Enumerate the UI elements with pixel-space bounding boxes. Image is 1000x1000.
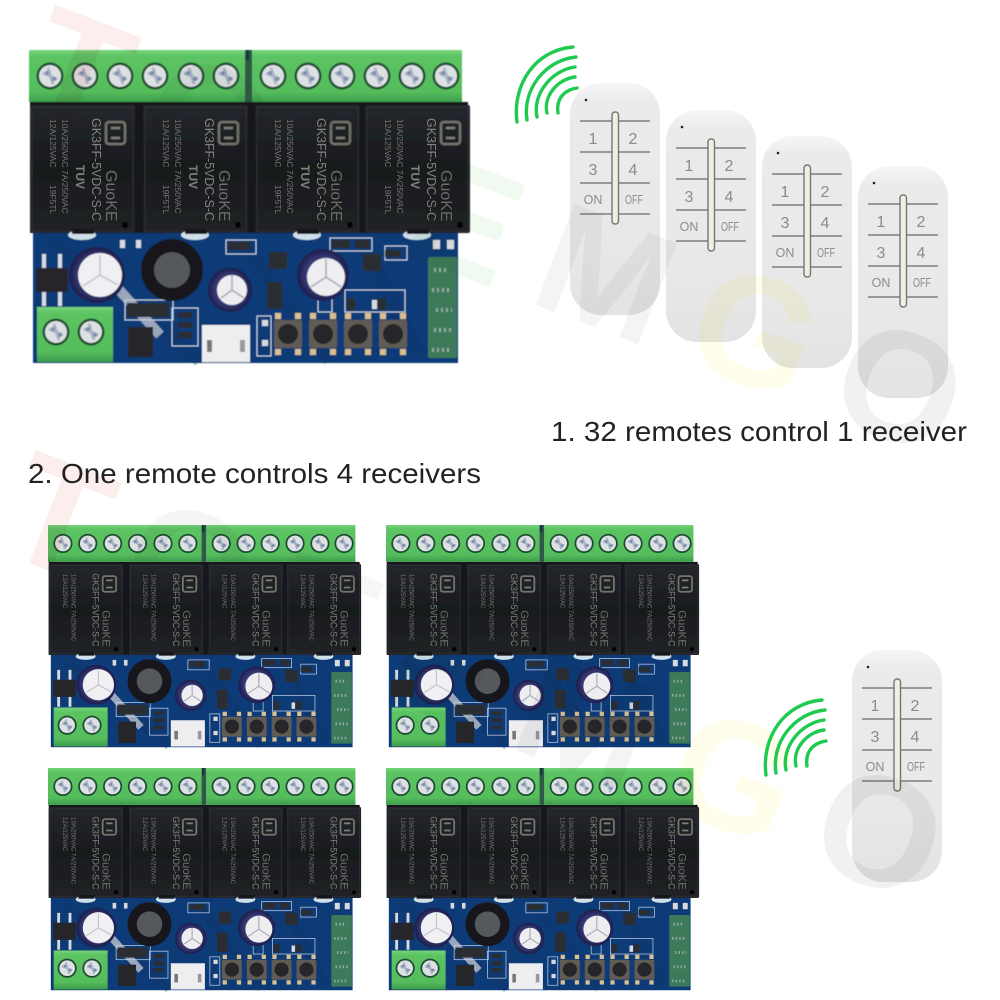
relay board: receiver 1 — [48, 525, 361, 747]
remote bottom: 2 — [911, 698, 920, 715]
relay board: main receiver — [29, 50, 470, 363]
relay board: receiver 2: 12A/125VAC — [479, 574, 485, 609]
relay markings: GuoKE — [102, 170, 119, 222]
remote 3 — [762, 136, 852, 368]
remote 4: OFF — [913, 276, 931, 290]
relay board: receiver 1: GuoKE — [338, 610, 350, 647]
relay markings: 12A/125VAC — [383, 119, 393, 168]
remote 2: ON — [680, 220, 698, 234]
relay board: receiver 1: 12A/125VAC — [141, 574, 147, 609]
relay markings: 12A/125VAC — [48, 119, 58, 168]
remote 3: ON — [776, 246, 794, 260]
relay board: receiver 4: 10A/250VAC 7A/250VAC — [488, 817, 494, 885]
remote 4 — [858, 166, 948, 398]
remote 2: 4 — [725, 189, 734, 206]
relay board: receiver 1: 10A/250VAC 7A/250VAC — [69, 574, 75, 642]
remote 2 — [666, 110, 756, 342]
relay board: receiver 2: 12A/125VAC — [399, 574, 405, 609]
relay board: receiver 4: 12A/125VAC — [559, 817, 565, 852]
caption 1: 1. 32 remotes control 1 receiver — [551, 416, 967, 447]
relay markings: 10A/250VAC 7A/250VAC — [285, 119, 295, 214]
remote 3: 2 — [821, 184, 830, 201]
relay board: receiver 1: 12A/125VAC — [61, 574, 67, 609]
relay board: receiver 3: 10A/250VAC 7A/250VAC — [307, 817, 313, 885]
remote 4: 1 — [877, 214, 886, 231]
relay board: receiver 4: GK3FF-5VDC-S-C — [667, 816, 677, 890]
relay board: receiver 3: GK3FF-5VDC-S-C — [171, 816, 181, 890]
relay board: receiver 3: GuoKE — [100, 853, 112, 890]
remote 2: 2 — [725, 158, 734, 175]
relay board: receiver 3: 12A/125VAC — [141, 817, 147, 852]
relay board: receiver 1: 10A/250VAC 7A/250VAC — [150, 574, 156, 642]
relay board: receiver 3: 12A/125VAC — [61, 817, 67, 852]
remote 1: OFF — [625, 193, 643, 207]
relay board: receiver 3: GuoKE — [180, 853, 192, 890]
remote 4: 3 — [877, 245, 886, 262]
relay board: receiver 4: 12A/125VAC — [399, 817, 405, 852]
relay markings: GuoKE — [437, 170, 454, 222]
relay board: receiver 3: GuoKE — [259, 853, 271, 890]
relay markings: TUV — [186, 165, 200, 189]
relay board: receiver 3: GuoKE — [338, 853, 350, 890]
relay board: receiver 3: GK3FF-5VDC-S-C — [91, 816, 101, 890]
relay board: receiver 2: 12A/125VAC — [637, 574, 643, 609]
relay markings: 10A/250VAC 7A/250VAC — [395, 119, 405, 214]
relay board: receiver 4: GuoKE — [518, 853, 530, 890]
relay board: receiver 2: 10A/250VAC 7A/250VAC — [407, 574, 413, 642]
remote 1: 2 — [629, 131, 638, 148]
relay markings — [48, 118, 454, 222]
relay board: receiver 2: GK3FF-5VDC-S-C — [588, 573, 598, 647]
relay board: receiver 4: GuoKE — [597, 853, 609, 890]
relay board: receiver 2: GuoKE — [438, 610, 450, 647]
remote 3: OFF — [817, 246, 835, 260]
relay board: receiver 2: GuoKE — [597, 610, 609, 647]
remote bottom: OFF — [907, 760, 925, 774]
remote 2: 1 — [685, 158, 694, 175]
relay board: receiver 1: GuoKE — [259, 610, 271, 647]
relay board: receiver 4: 10A/250VAC 7A/250VAC — [567, 817, 573, 885]
relay board: receiver 1: 12A/125VAC — [299, 574, 305, 609]
relay board: receiver 3: 12A/125VAC — [221, 817, 227, 852]
remote 3: 1 — [781, 184, 790, 201]
relay board: receiver 4: GK3FF-5VDC-S-C — [509, 816, 519, 890]
remote 1: 3 — [589, 162, 598, 179]
relay board: receiver 1: GK3FF-5VDC-S-C — [171, 573, 181, 647]
remote 1 — [570, 83, 660, 315]
relay board: receiver 1: 10A/250VAC 7A/250VAC — [307, 574, 313, 642]
remote 1: 1 — [589, 131, 598, 148]
relay markings: GK3FF-5VDC-S-C — [314, 118, 328, 221]
relay markings: GK3FF-5VDC-S-C — [202, 118, 216, 221]
remote bottom: ON — [866, 760, 884, 774]
relay markings: 10A/250VAC 7A/250VAC — [173, 119, 183, 214]
relay board: receiver 2: GuoKE — [676, 610, 688, 647]
remote 1: 4 — [629, 162, 638, 179]
relay board: receiver 4: 12A/125VAC — [479, 817, 485, 852]
relay board: receiver 4: 12A/125VAC — [637, 817, 643, 852]
relay board: receiver 1: GuoKE — [180, 610, 192, 647]
relay board: receiver 3: 12A/125VAC — [299, 817, 305, 852]
remote 2: OFF — [721, 220, 739, 234]
remote bottom: 4 — [911, 729, 920, 746]
remote 4: 4 — [917, 245, 926, 262]
relay board: receiver 2: GK3FF-5VDC-S-C — [509, 573, 519, 647]
relay board: receiver 2: GK3FF-5VDC-S-C — [667, 573, 677, 647]
caption 2: 2. One remote controls 4 receivers — [28, 458, 481, 489]
remote 4: ON — [872, 276, 890, 290]
relay board: receiver 3: 10A/250VAC 7A/250VAC — [229, 817, 235, 885]
relay board: receiver 2: 10A/250VAC 7A/250VAC — [645, 574, 651, 642]
relay markings: 19F5TL — [48, 185, 58, 215]
relay board: receiver 4: GuoKE — [676, 853, 688, 890]
relay board: receiver 4: GK3FF-5VDC-S-C — [429, 816, 439, 890]
relay board: receiver 3: 10A/250VAC 7A/250VAC — [69, 817, 75, 885]
relay board: receiver 4 — [386, 768, 699, 990]
relay markings: TUV — [298, 165, 312, 189]
relay markings: GK3FF-5VDC-S-C — [424, 118, 438, 221]
relay board: receiver 2: 10A/250VAC 7A/250VAC — [567, 574, 573, 642]
relay board: receiver 3: 10A/250VAC 7A/250VAC — [150, 817, 156, 885]
relay board: receiver 1: GuoKE — [100, 610, 112, 647]
relay markings: TUV — [73, 165, 87, 189]
relay board: receiver 2: 12A/125VAC — [559, 574, 565, 609]
relay markings: GuoKE — [215, 170, 232, 222]
relay board: receiver 1: GK3FF-5VDC-S-C — [91, 573, 101, 647]
relay board: receiver 4: GuoKE — [438, 853, 450, 890]
relay markings: TUV — [408, 165, 422, 189]
relay board: receiver 2 — [386, 525, 699, 747]
relay board: receiver 2: GK3FF-5VDC-S-C — [429, 573, 439, 647]
relay markings: 12A/125VAC — [161, 119, 171, 168]
remote 1: ON — [584, 193, 602, 207]
relay board: receiver 3 — [48, 768, 361, 990]
relay board: receiver 1: 12A/125VAC — [221, 574, 227, 609]
relay board: receiver 1: 10A/250VAC 7A/250VAC — [229, 574, 235, 642]
relay board: receiver 3: GK3FF-5VDC-S-C — [250, 816, 260, 890]
remote 4: 2 — [917, 214, 926, 231]
remote 2: 3 — [685, 189, 694, 206]
relay markings: GuoKE — [327, 170, 344, 222]
remote bottom: 1 — [871, 698, 880, 715]
watermark: TOTEMGO — [0, 418, 968, 936]
relay board: receiver 2: 10A/250VAC 7A/250VAC — [488, 574, 494, 642]
relay markings: GK3FF-5VDC-S-C — [89, 118, 103, 221]
relay markings: 19F5TL — [383, 185, 393, 215]
relay markings: 10A/250VAC 7A/250VAC — [60, 119, 70, 214]
relay board: receiver 2: GuoKE — [518, 610, 530, 647]
relay markings: 12A/125VAC — [273, 119, 283, 168]
icon: wireless signal bottom — [765, 700, 826, 775]
relay board: receiver 3: GK3FF-5VDC-S-C — [329, 816, 339, 890]
remote 3: 3 — [781, 215, 790, 232]
relay board: receiver 4: 10A/250VAC 7A/250VAC — [407, 817, 413, 885]
relay board: receiver 1: GK3FF-5VDC-S-C — [250, 573, 260, 647]
remote 3: 4 — [821, 215, 830, 232]
remote bottom — [852, 650, 942, 882]
relay board: receiver 4: GK3FF-5VDC-S-C — [588, 816, 598, 890]
icon: wireless signal top — [516, 47, 577, 122]
remote bottom: 3 — [871, 729, 880, 746]
relay markings: 19F5TL — [273, 185, 283, 215]
relay markings: 19F5TL — [161, 185, 171, 215]
relay board: receiver 4: 10A/250VAC 7A/250VAC — [645, 817, 651, 885]
relay board: receiver 1: GK3FF-5VDC-S-C — [329, 573, 339, 647]
